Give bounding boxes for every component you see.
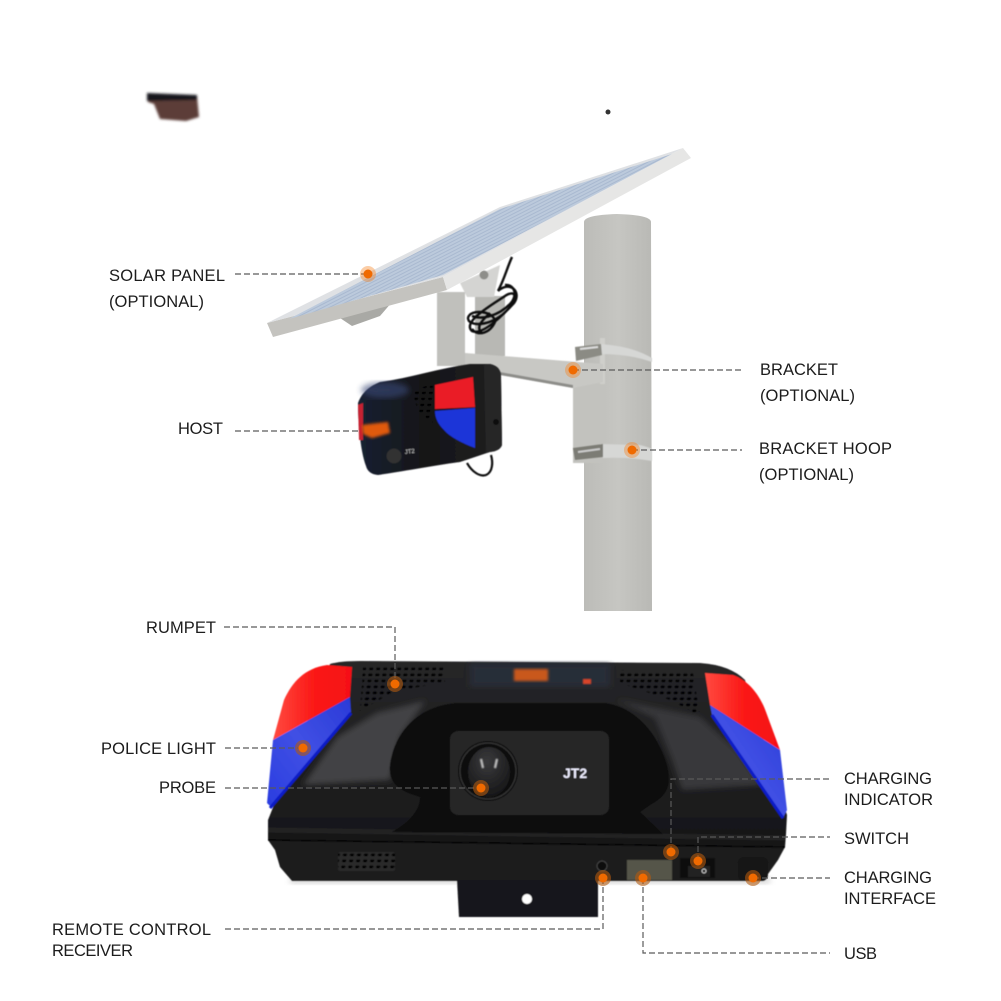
- callout: bracket hoop: (OPTIONAL): [759, 466, 854, 484]
- photo: host close-up: [267, 661, 787, 917]
- callout: charging indicator: INDICATOR: [844, 791, 933, 809]
- image artifact: speck: [606, 110, 610, 114]
- recess: [390, 703, 669, 834]
- callout: police light: POLICE LIGHT: [101, 740, 216, 758]
- callout: charging indicator: [663, 770, 933, 860]
- textured highlight: [303, 701, 425, 785]
- callout: bracket: (OPTIONAL): [760, 387, 855, 405]
- callout: solar panel: SOLAR PANEL: [109, 267, 225, 285]
- speaker grille left: [360, 665, 445, 711]
- callout: trumpet: [146, 619, 403, 692]
- callout: solar panel: (OPTIONAL): [109, 293, 204, 311]
- callout: charging interface: CHARGING: [844, 869, 932, 887]
- callout: remote control receiver: RECEIVER: [52, 942, 133, 960]
- callout: bracket hoop: BRACKET HOOP: [759, 440, 892, 458]
- lower shell: [268, 840, 785, 881]
- callout: bracket hoop: [624, 440, 892, 484]
- callout: switch: SWITCH: [844, 830, 909, 848]
- photo: solar panel: [267, 148, 691, 337]
- image artifact: dark smudge: [147, 93, 199, 121]
- callout: bracket: BRACKET: [760, 361, 838, 379]
- callout: probe: [159, 779, 489, 797]
- right police light: [705, 673, 787, 818]
- callout: usb: USB: [844, 945, 877, 963]
- ports: [597, 861, 607, 871]
- photo: cable: [468, 257, 517, 333]
- photo: bracket: [437, 265, 605, 463]
- callout: charging indicator: CHARGING: [844, 770, 932, 788]
- callout: host: HOST: [178, 420, 223, 438]
- left police light: [267, 665, 352, 808]
- callout: solar panel: [109, 266, 376, 311]
- callout: remote control receiver: REMOTE CONTROL: [52, 921, 211, 939]
- photo: host mounted on pole: [358, 364, 502, 475]
- shadow: [290, 876, 770, 884]
- mounting plate: [457, 880, 598, 917]
- callout: usb: [635, 870, 877, 963]
- callout: charging interface: INTERFACE: [844, 890, 936, 908]
- callout: bracket: [565, 361, 855, 405]
- callout: remote control receiver: [52, 870, 611, 960]
- probe module: [450, 731, 609, 815]
- small logo text on host: JT2: [404, 449, 416, 456]
- callout: switch: [690, 830, 909, 869]
- grille on lower shell: [338, 852, 395, 871]
- callout: probe: PROBE: [159, 779, 216, 797]
- photo: bracket hoops: [573, 344, 652, 461]
- speaker grille right: [620, 670, 700, 716]
- photo: pole: [584, 214, 652, 611]
- callout: police light: [101, 740, 311, 758]
- upper shell: [268, 661, 787, 847]
- logo text: JT2: [563, 765, 587, 781]
- callout: charging interface: [745, 869, 936, 908]
- top reflection: [470, 663, 610, 687]
- callout: trumpet: RUMPET: [146, 619, 216, 637]
